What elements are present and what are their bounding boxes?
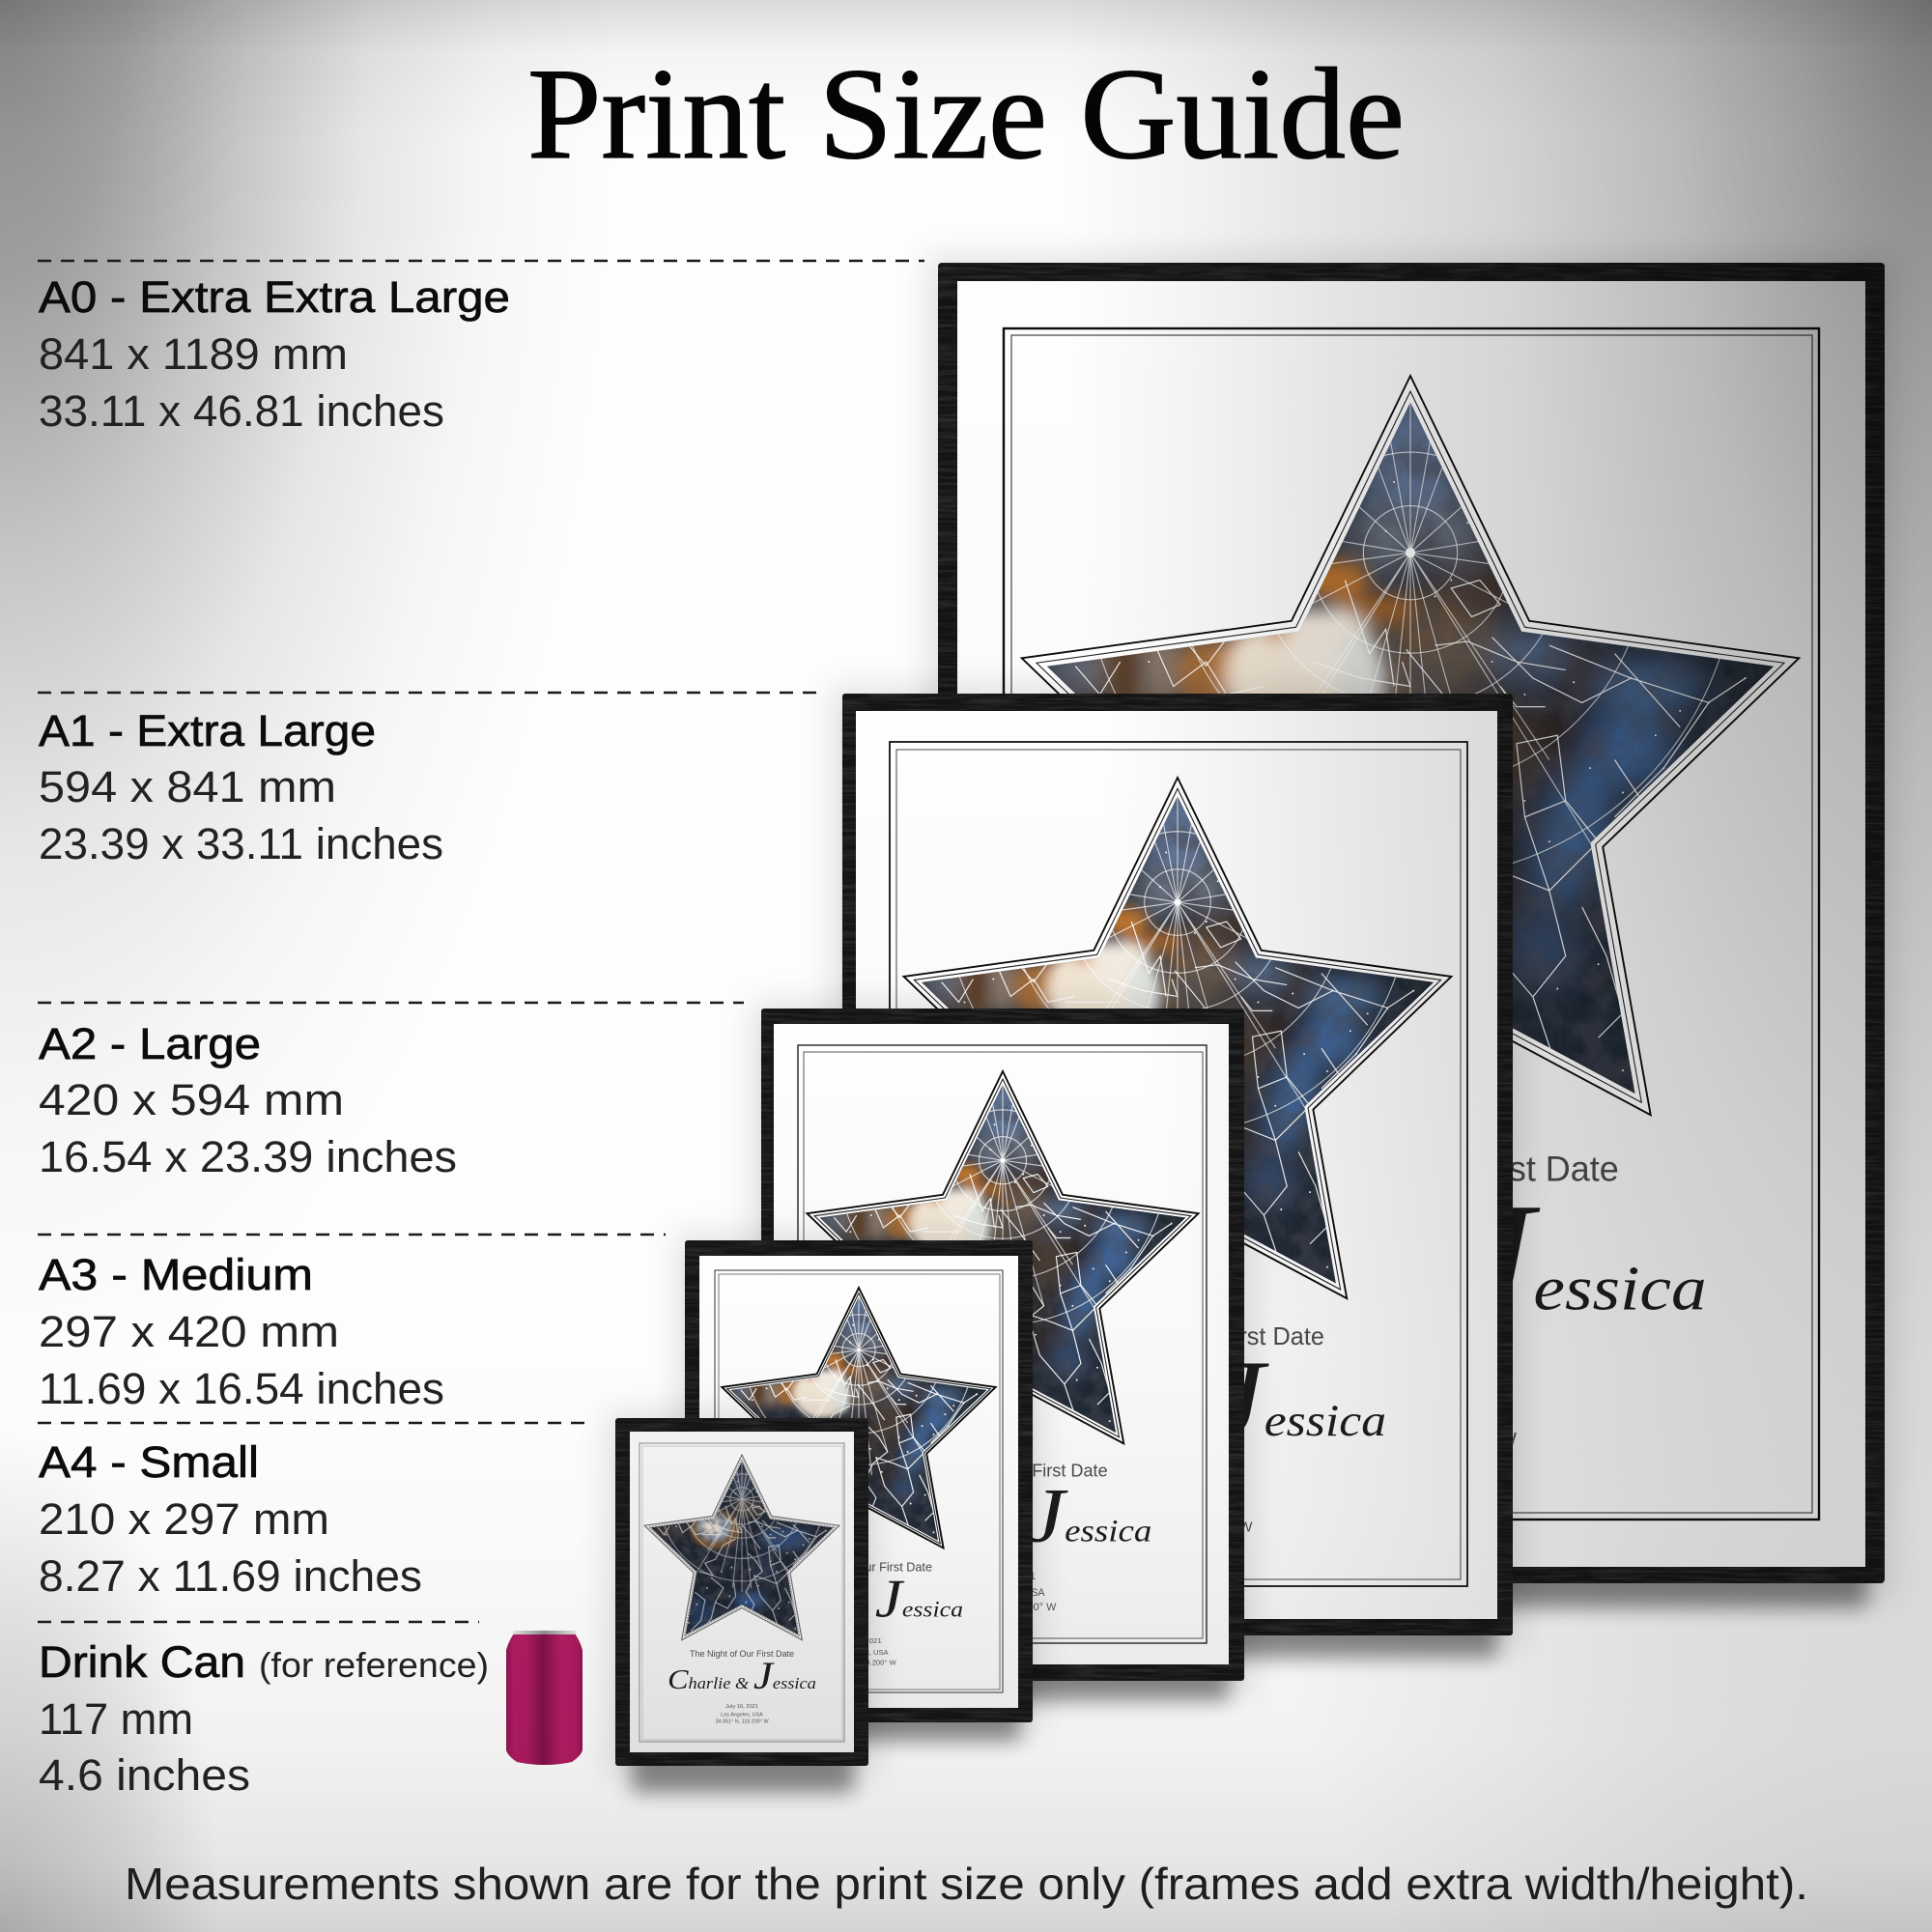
size label: A2: A2 - Large [39,1019,261,1068]
star map: A1 [890,672,1465,1324]
poster caption: A3 [754,1560,963,1666]
size label: A2 [38,1003,744,1181]
size label: A3: 297 x 420 mm [39,1307,339,1356]
size label: A0: A0 - Extra Extra Large [39,272,510,322]
poster caption: A4: Charlie & Jessica [668,1654,816,1697]
poster frame: A1 [831,672,1524,1658]
star map: A0 [1002,226,1819,1152]
size label: A3 [38,1235,666,1413]
size label: A4 [38,1423,591,1601]
size label: A0: 841 x 1189 mm [39,329,348,379]
poster caption: A4: Los Angeles, USA [721,1712,763,1718]
poster caption: A4 [668,1649,816,1725]
poster caption: A0: C harlie & J essica [1114,1172,1707,1344]
title: Print Size Guide [527,43,1405,186]
size label: A4: A4 - Small [39,1437,259,1487]
size label: A1 [38,693,823,868]
footnote: Measurements shown are for the print size only (frames add extra width/height). [125,1859,1808,1909]
size label: A2: 420 x 594 mm [39,1075,344,1124]
poster caption: A2: The Night of Our First Date [897,1461,1108,1481]
poster frame: A3 [676,1233,1041,1741]
poster caption: A2: 34.051° N, 118.200° W [950,1602,1056,1613]
poster caption: A3: Los Angeles, USA [829,1648,889,1657]
poster caption: A1 [969,1321,1386,1536]
size label: drink can: 117 mm [39,1694,193,1744]
size label: A0: 33.11 x 46.81 inches [39,386,444,436]
size label: drink can: Drink Can [39,1637,245,1687]
size label: A1: 594 x 841 mm [39,762,336,811]
star map: A3 [715,1235,1003,1561]
size label: A4: 210 x 297 mm [39,1494,329,1544]
poster caption: A2 [854,1461,1151,1613]
star map: A4 [639,1417,844,1649]
poster caption: A4: 34.051° N, 118.200° W [715,1719,769,1725]
size label: drink can: (for reference) [259,1645,489,1685]
poster caption: A1: Los Angeles, USA [1119,1500,1236,1516]
poster caption: A2: Los Angeles, USA [960,1587,1046,1599]
poster caption: A0 [1114,1148,1707,1451]
poster caption: A0: 34.051° N, 118.200° W [1304,1429,1517,1451]
poster caption: A3: 34.051° N, 118.200° W [821,1658,896,1666]
poster caption: A1: The Night of Our First Date [1031,1321,1324,1350]
poster frame: A4 [607,1410,877,1793]
poster caption: A3: Charlie & Jessica [754,1569,963,1629]
size label: A1: A1 - Extra Large [39,706,376,755]
poster caption: A4: July 16, 2021 [725,1704,758,1710]
poster caption: A0: July 16, 2021 [1345,1368,1476,1390]
poster caption: A1: July 16, 2021 [1131,1477,1224,1492]
poster caption: A3: The Night of Our First Date [785,1560,932,1575]
poster caption: A0: Los Angeles, USA [1326,1401,1495,1423]
size label: drink can: 4.6 inches [39,1750,250,1800]
poster frame: A2 [752,996,1254,1700]
poster frame: A0 [927,226,1895,1607]
icon: drink can [506,1631,582,1765]
size label: A4: 8.27 x 11.69 inches [39,1551,422,1601]
poster caption: A0: The Night of Our First Date [1202,1148,1619,1188]
size label: drink can [38,1622,489,1800]
star map: A2 [797,996,1208,1463]
size label: A3: A3 - Medium [39,1250,313,1299]
poster caption: A1: 34.051° N, 118.200° W [1103,1520,1252,1536]
size label: A2: 16.54 x 23.39 inches [39,1132,457,1181]
size label: A1: 23.39 x 33.11 inches [39,819,443,868]
poster caption: A3: July 16, 2021 [836,1636,882,1645]
poster caption: A1: C harlie & J essica [969,1339,1386,1460]
size label: A3: 11.69 x 16.54 inches [39,1364,444,1413]
poster caption: A2: July 16, 2021 [970,1571,1036,1582]
poster caption: A4: The Night of Our First Date [690,1649,794,1659]
size label: A0 [38,261,924,436]
poster caption: A2: C harlie & J essica [854,1472,1151,1559]
